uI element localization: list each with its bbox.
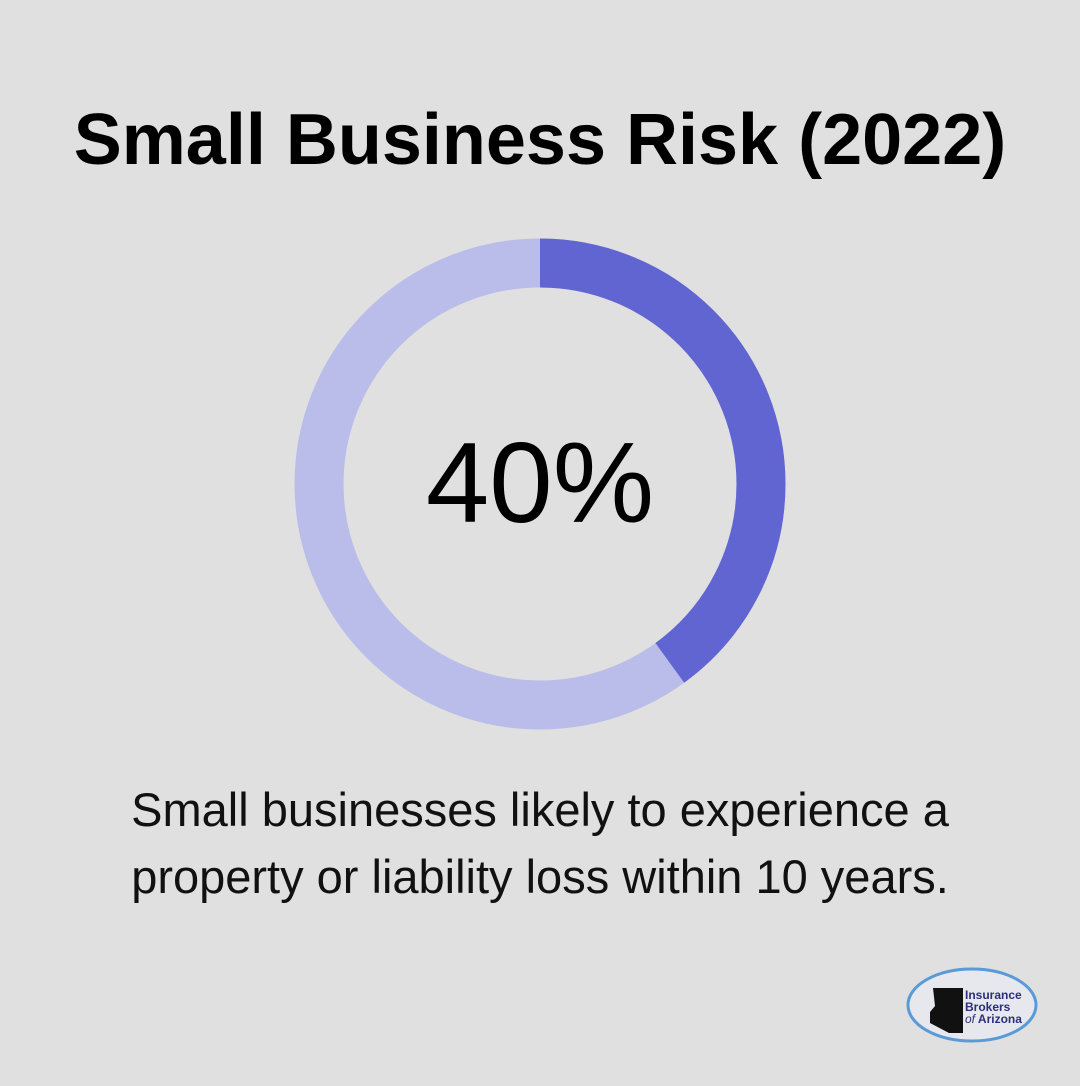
logo: Insurance (965, 988, 1022, 1002)
caption: Small businesses likely to experience a (131, 783, 949, 836)
caption (131, 783, 949, 903)
logo: of Arizona (965, 1012, 1022, 1026)
donut chart: 40% (426, 420, 654, 547)
logo (906, 968, 1038, 1042)
logo: Brokers (965, 1000, 1011, 1014)
title: Small Business Risk (2022) (74, 100, 1006, 180)
caption: property or liability loss within 10 years. (131, 850, 949, 903)
